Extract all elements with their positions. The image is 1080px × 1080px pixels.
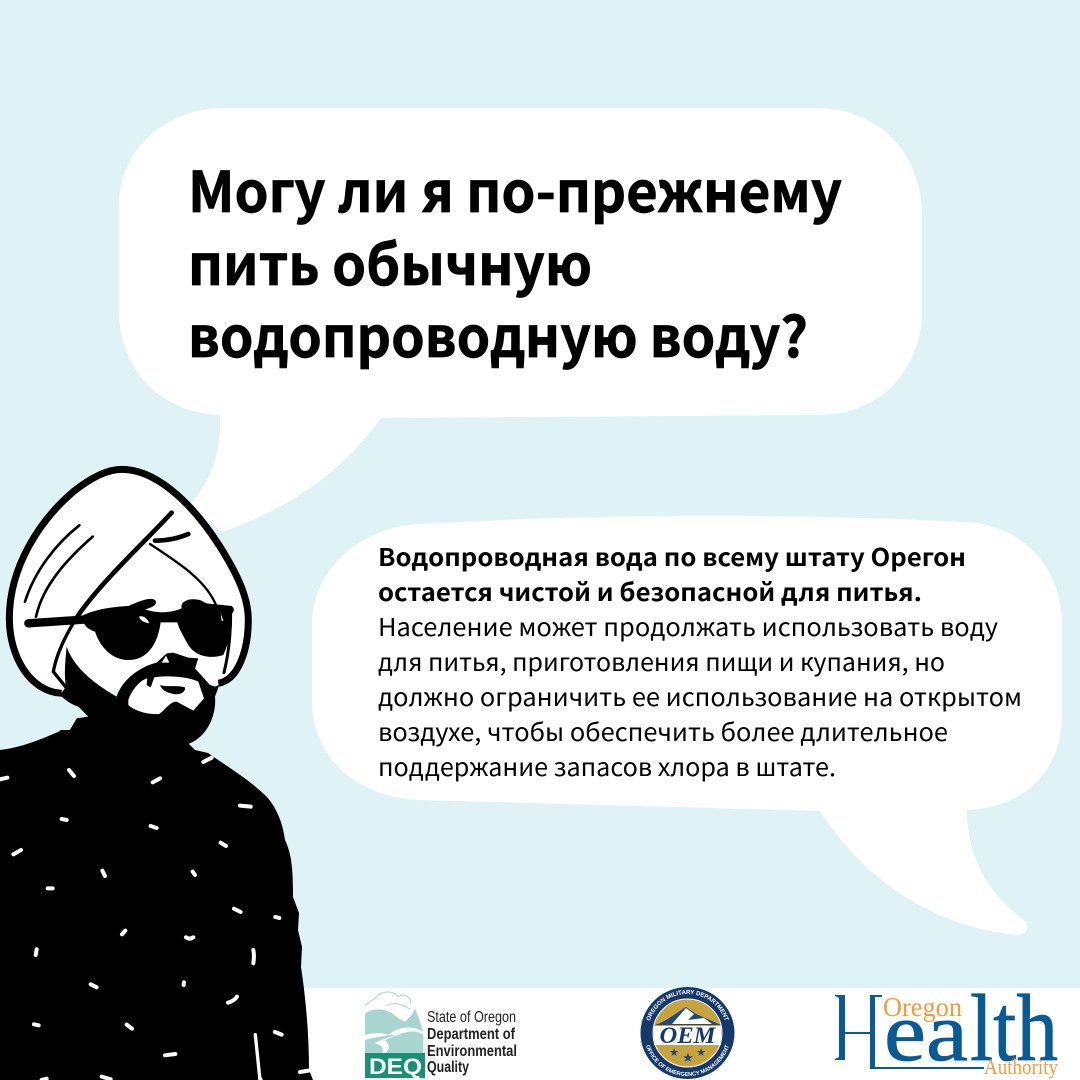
face: sunglasses and beard (60, 599, 234, 757)
heading: Могу ли я по-прежнему (188, 148, 842, 229)
logo: OEM seal: OEM (660, 1023, 717, 1048)
logo: OEM seal: OREGON MILITARY DEPARTMENT (646, 990, 729, 1020)
logo: Oregon Health Authority: Authority (984, 1054, 1058, 1079)
DEQ wording: Quality (427, 1059, 469, 1076)
turban fold lines (25, 513, 231, 687)
answer text: для питья, приготовления пищи и купания, но (378, 644, 945, 679)
DEQ wording (427, 1009, 517, 1076)
answer text: воздухе, чтобы обеспечить более длительное (378, 714, 948, 749)
beard white patch (128, 676, 204, 714)
speech bubble: answer (312, 516, 1062, 935)
logo: DEQ: DEQ (369, 1054, 422, 1079)
logo: DEQ (365, 992, 517, 1079)
heading (188, 148, 842, 374)
logo: Oregon Health Authority: Oregon (883, 992, 962, 1022)
speech bubble: question (119, 108, 922, 532)
answer text: Население может продолжать использовать воду (378, 609, 998, 644)
footer band (0, 988, 1080, 1080)
logo: OEM seal (640, 987, 734, 1079)
DEQ wording: State of Oregon (427, 1009, 516, 1026)
OEM stars: ★ (669, 1047, 679, 1059)
answer text (378, 539, 1022, 784)
logo: OEM seal: OFFICE OF EMERGENCY MANAGEMENT (646, 1044, 729, 1076)
OEM stars: ★ (696, 1047, 706, 1059)
DEQ wording: Department of (427, 1026, 516, 1043)
OEM mountain (655, 1007, 721, 1025)
sunglasses (82, 599, 234, 660)
sunglasses temple (28, 619, 88, 623)
lens highlights (139, 616, 149, 623)
sweater (0, 700, 313, 1080)
DEQ wording: Environmental (427, 1043, 517, 1060)
illustration: man with turban and sunglasses (0, 469, 313, 1080)
DEQ landscape (365, 992, 423, 1053)
beard (60, 647, 219, 757)
answer text: поддержание запасов хлора в штате. (378, 749, 836, 784)
heading: пить обычную (188, 221, 592, 302)
nose highlight (162, 656, 169, 663)
sweater flecks (0, 758, 308, 1080)
logo: Oregon Health Authority (835, 975, 1058, 1080)
logo: Oregon Health Authority: lth (970, 975, 1058, 1080)
heading: водопроводную воду? (188, 293, 808, 374)
head and turban (9, 469, 248, 693)
DEQ block (365, 1053, 425, 1078)
OEM stars: ★ (682, 1050, 694, 1065)
turban (9, 469, 248, 693)
H bracket (835, 995, 984, 1069)
mouth (160, 685, 185, 694)
OEM stars (669, 1047, 706, 1065)
answer text: остается чистой и безопасной для питья. (378, 574, 922, 609)
answer text: Водопроводная вода по всему штату Орегон (378, 539, 966, 574)
answer text: должно ограничить ее использование на открытом (378, 679, 1022, 714)
OEM band (654, 1026, 721, 1045)
logo: Oregon Health Authority: ea (884, 986, 968, 1079)
